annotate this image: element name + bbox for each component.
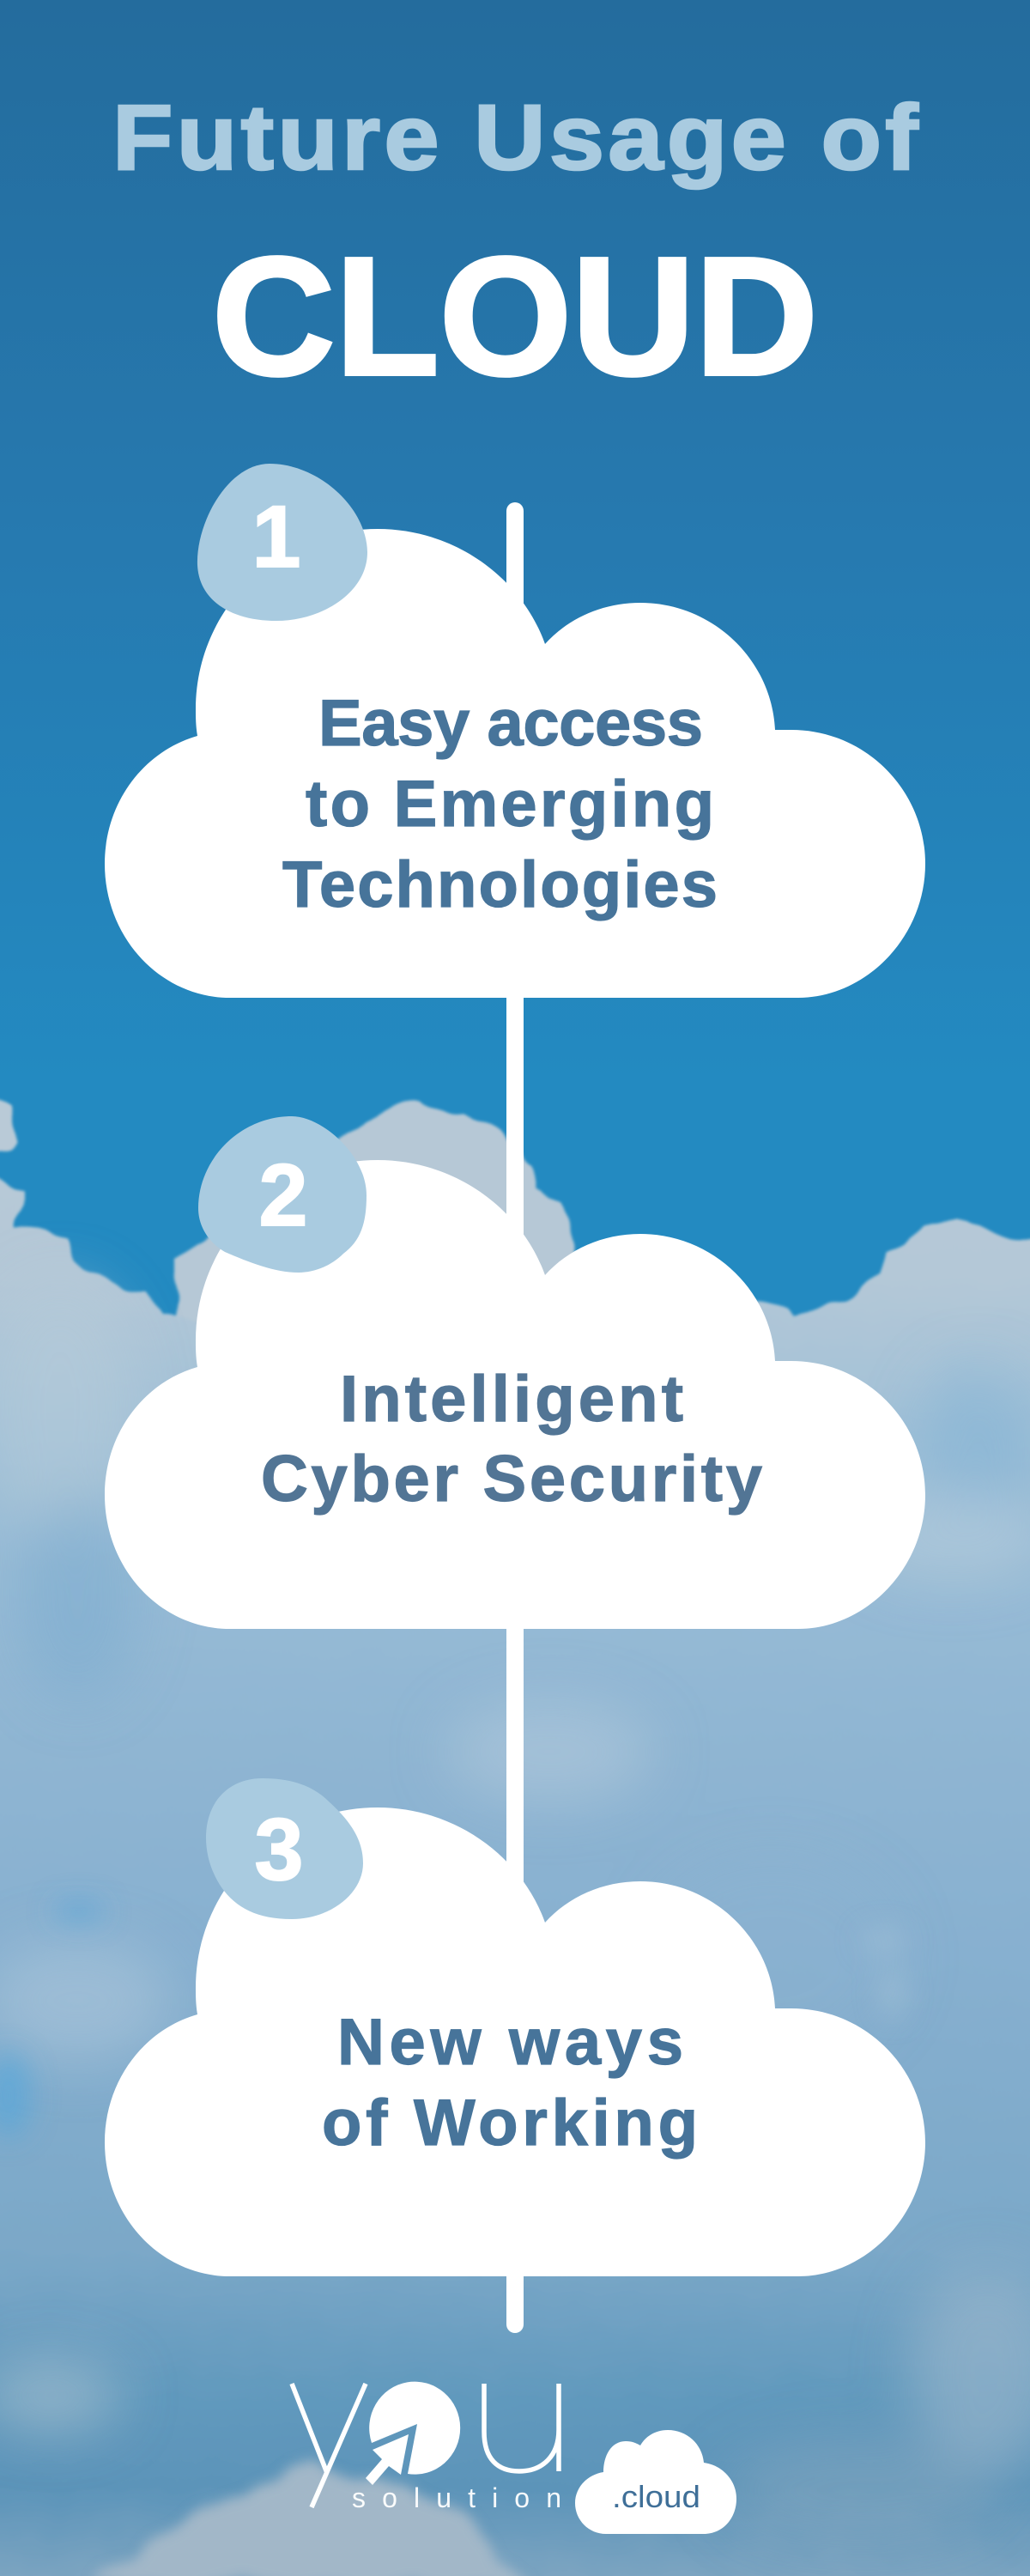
logo: you solution .cloud bbox=[292, 2382, 736, 2534]
step 3 text bbox=[322, 2006, 698, 2160]
logo word solution: solution bbox=[352, 2482, 561, 2513]
step 2 text: Intelligent bbox=[340, 1363, 683, 1436]
cloud shape 2 bbox=[105, 1160, 925, 1629]
logo letter u bbox=[484, 2384, 559, 2471]
logo cloud badge: .cloud bbox=[612, 2479, 700, 2514]
title bbox=[112, 85, 922, 410]
badge 2 bbox=[198, 1116, 367, 1273]
badge 3: 3 bbox=[255, 1801, 303, 1899]
title line: Future Usage of: Future Usage of bbox=[112, 85, 922, 189]
timeline connector bbox=[506, 502, 524, 2333]
step 1 text: to Emerging bbox=[306, 768, 714, 841]
step 2 text: Cyber Security bbox=[261, 1443, 762, 1516]
logo letter y bbox=[292, 2384, 366, 2507]
panel: step 3 bbox=[105, 1778, 925, 2276]
logo cloud badge bbox=[575, 2430, 736, 2534]
cloud shape 3 bbox=[105, 1807, 925, 2276]
panel: step 1 bbox=[105, 464, 925, 998]
title line: CLOUD: CLOUD bbox=[212, 222, 818, 410]
badge 1 bbox=[197, 464, 367, 621]
badge 3 bbox=[206, 1778, 363, 1919]
step 1 text: Technologies bbox=[282, 848, 718, 921]
step 2 text bbox=[261, 1363, 762, 1516]
badge 1: 1 bbox=[252, 488, 300, 586]
panel: step 2 bbox=[105, 1116, 925, 1629]
step 3 text: of Working bbox=[322, 2087, 698, 2160]
step 3 text: New ways bbox=[337, 2006, 683, 2079]
badge 2: 2 bbox=[259, 1146, 307, 1244]
step 1 text: Easy access bbox=[318, 687, 703, 760]
logo letter o with cursor bbox=[366, 2382, 460, 2485]
step 1 text bbox=[282, 687, 718, 921]
cloud shape 1 bbox=[105, 529, 925, 998]
